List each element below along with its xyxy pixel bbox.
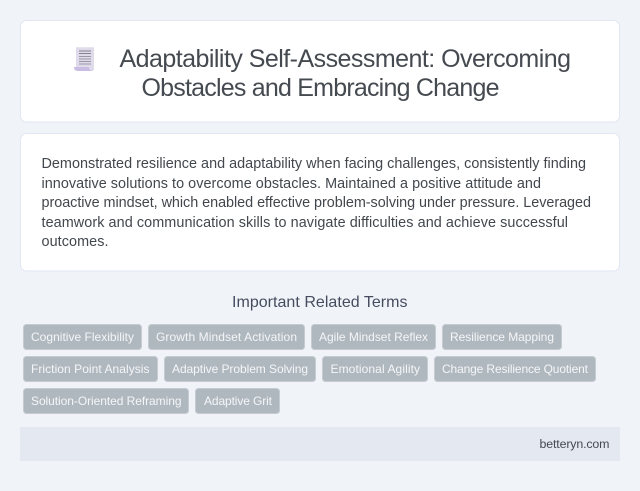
footer bar	[20, 427, 620, 461]
tag	[434, 356, 596, 382]
title: Adaptability Self-Assessment: Overcoming	[120, 45, 571, 73]
description text: proactive mindset, which enabled effective problem-solving under pressure. Leveraged	[42, 195, 591, 211]
panel: description card	[20, 134, 620, 271]
tag	[442, 324, 562, 350]
tag	[312, 324, 436, 350]
tag: Solution-Oriented Reframing	[31, 394, 182, 408]
description text: Demonstrated resilience and adaptability when facing challenges, consistently finding	[42, 156, 586, 172]
tag group: related terms	[24, 324, 596, 414]
tag	[24, 388, 188, 414]
icon: document scroll	[74, 47, 94, 71]
tag	[196, 388, 280, 414]
heading: related terms: Important Related Terms	[232, 294, 408, 311]
tag: Adaptive Grit	[204, 394, 273, 408]
description text: outcomes.	[42, 234, 108, 250]
tag	[24, 324, 142, 350]
title: Obstacles and Embracing Change	[142, 74, 500, 102]
description text: teamwork and communication skills to navigate difficulties and achieve successful	[42, 215, 568, 231]
footer: source: betteryn.com	[540, 437, 610, 451]
tag: Friction Point Analysis	[31, 362, 150, 376]
tag: Agile Mindset Reflex	[319, 330, 428, 344]
description text	[42, 156, 591, 250]
tag: Cognitive Flexibility	[31, 330, 134, 344]
title	[120, 45, 571, 102]
tag: Adaptive Problem Solving	[172, 362, 308, 376]
tag	[164, 356, 316, 382]
tag: Emotional Agility	[330, 362, 420, 376]
tag: Growth Mindset Activation	[156, 330, 297, 344]
description text: innovative solutions to overcome obstacles. Maintained a positive attitude and	[42, 176, 541, 192]
panel: title card	[20, 20, 620, 122]
tag: Resilience Mapping	[450, 330, 554, 344]
tag: Change Resilience Quotient	[442, 362, 589, 376]
tag	[148, 324, 304, 350]
tag	[24, 356, 158, 382]
tag	[322, 356, 428, 382]
